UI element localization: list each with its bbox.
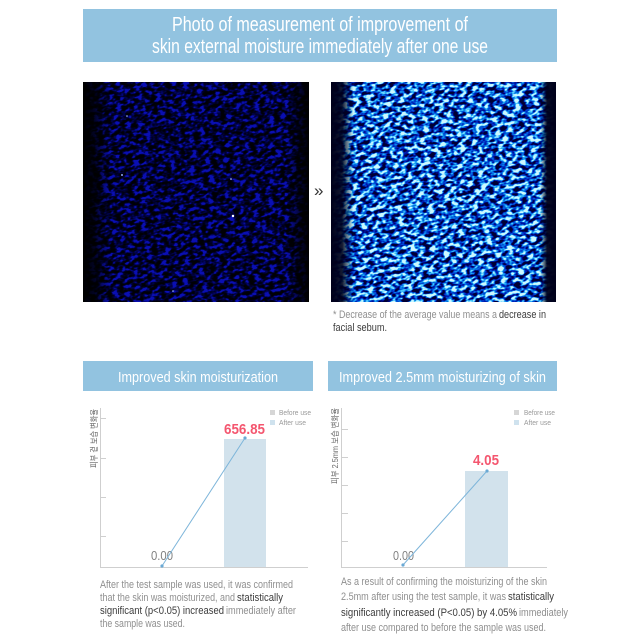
- heading: improved 2.5mm moisturizing: Improved 2.5mm moisturizing of skin: [339, 369, 546, 386]
- value: 4.05: 4.05: [473, 452, 499, 469]
- footnote: [333, 309, 546, 334]
- text: 2.5mm moisturizing result: significantly increased (P<0.05) by 4.05%: [341, 607, 517, 619]
- heading: improved skin moisturization: [83, 361, 313, 391]
- text: 2.5mm moisturizing result: after use compared to before the sample was used.: [341, 622, 546, 634]
- title banner: [83, 9, 557, 62]
- legend: [270, 408, 311, 427]
- text: 2.5mm moisturizing result: [341, 576, 568, 634]
- text: 2.5mm moisturizing result: As a result of confirming the moisturizing of the skin: [341, 576, 547, 588]
- legend: [514, 408, 555, 427]
- text: skin moisturization result: statistically: [237, 592, 283, 604]
- footnote: * Decrease of the average value means a: [333, 309, 498, 321]
- legend: Before use: [279, 408, 311, 417]
- trend line: [401, 469, 489, 567]
- heading: improved 2.5mm moisturizing: [328, 361, 557, 391]
- heading: improved skin moisturization: Improved skin moisturization: [118, 369, 278, 386]
- photo: before use moisture measurement: [83, 82, 309, 302]
- chart: skin moisturization: [89, 408, 311, 568]
- text: skin moisturization result: immediately after: [226, 605, 296, 617]
- footnote: decrease in: [499, 309, 546, 321]
- text: 2.5mm moisturizing result: immediately: [519, 607, 568, 619]
- text: skin moisturization result: that the skin was moisturized, and: [100, 592, 235, 604]
- legend: After use: [524, 418, 551, 427]
- text: skin moisturization result: After the test sample was used, it was confirmed: [100, 579, 293, 591]
- text: skin moisturization result: the sample was used.: [100, 618, 185, 630]
- text: 2.5mm moisturizing result: 2.5mm after using the test sample, it was: [341, 591, 506, 603]
- text: 2.5mm moisturizing result: statistically: [508, 591, 554, 603]
- bar: after use: [224, 439, 266, 567]
- value: 0.00: 0.00: [393, 548, 414, 563]
- trend line: [160, 436, 247, 568]
- chart: 2.5mm moisturizing: [330, 408, 555, 568]
- photo: after use moisture measurement: [331, 82, 556, 302]
- title banner: skin external moisture immediately after one use: [152, 36, 488, 58]
- y axis label: 피부 2.5mm 보습 변화율: [330, 408, 340, 484]
- title banner: Photo of measurement of improvement of: [172, 14, 468, 36]
- arrow: before to after: »: [314, 181, 323, 200]
- value: 0.00: 0.00: [151, 548, 173, 563]
- y axis label: 피부 겉 보습 변화율: [89, 409, 99, 468]
- text: skin moisturization result: [100, 579, 296, 630]
- legend: After use: [279, 418, 306, 427]
- footnote: facial sebum.: [333, 322, 387, 334]
- text: skin moisturization result: significant (p<0.05) increased: [100, 605, 224, 617]
- bar: after use: [465, 471, 508, 567]
- legend: Before use: [524, 408, 555, 417]
- value: 656.85: 656.85: [224, 421, 265, 438]
